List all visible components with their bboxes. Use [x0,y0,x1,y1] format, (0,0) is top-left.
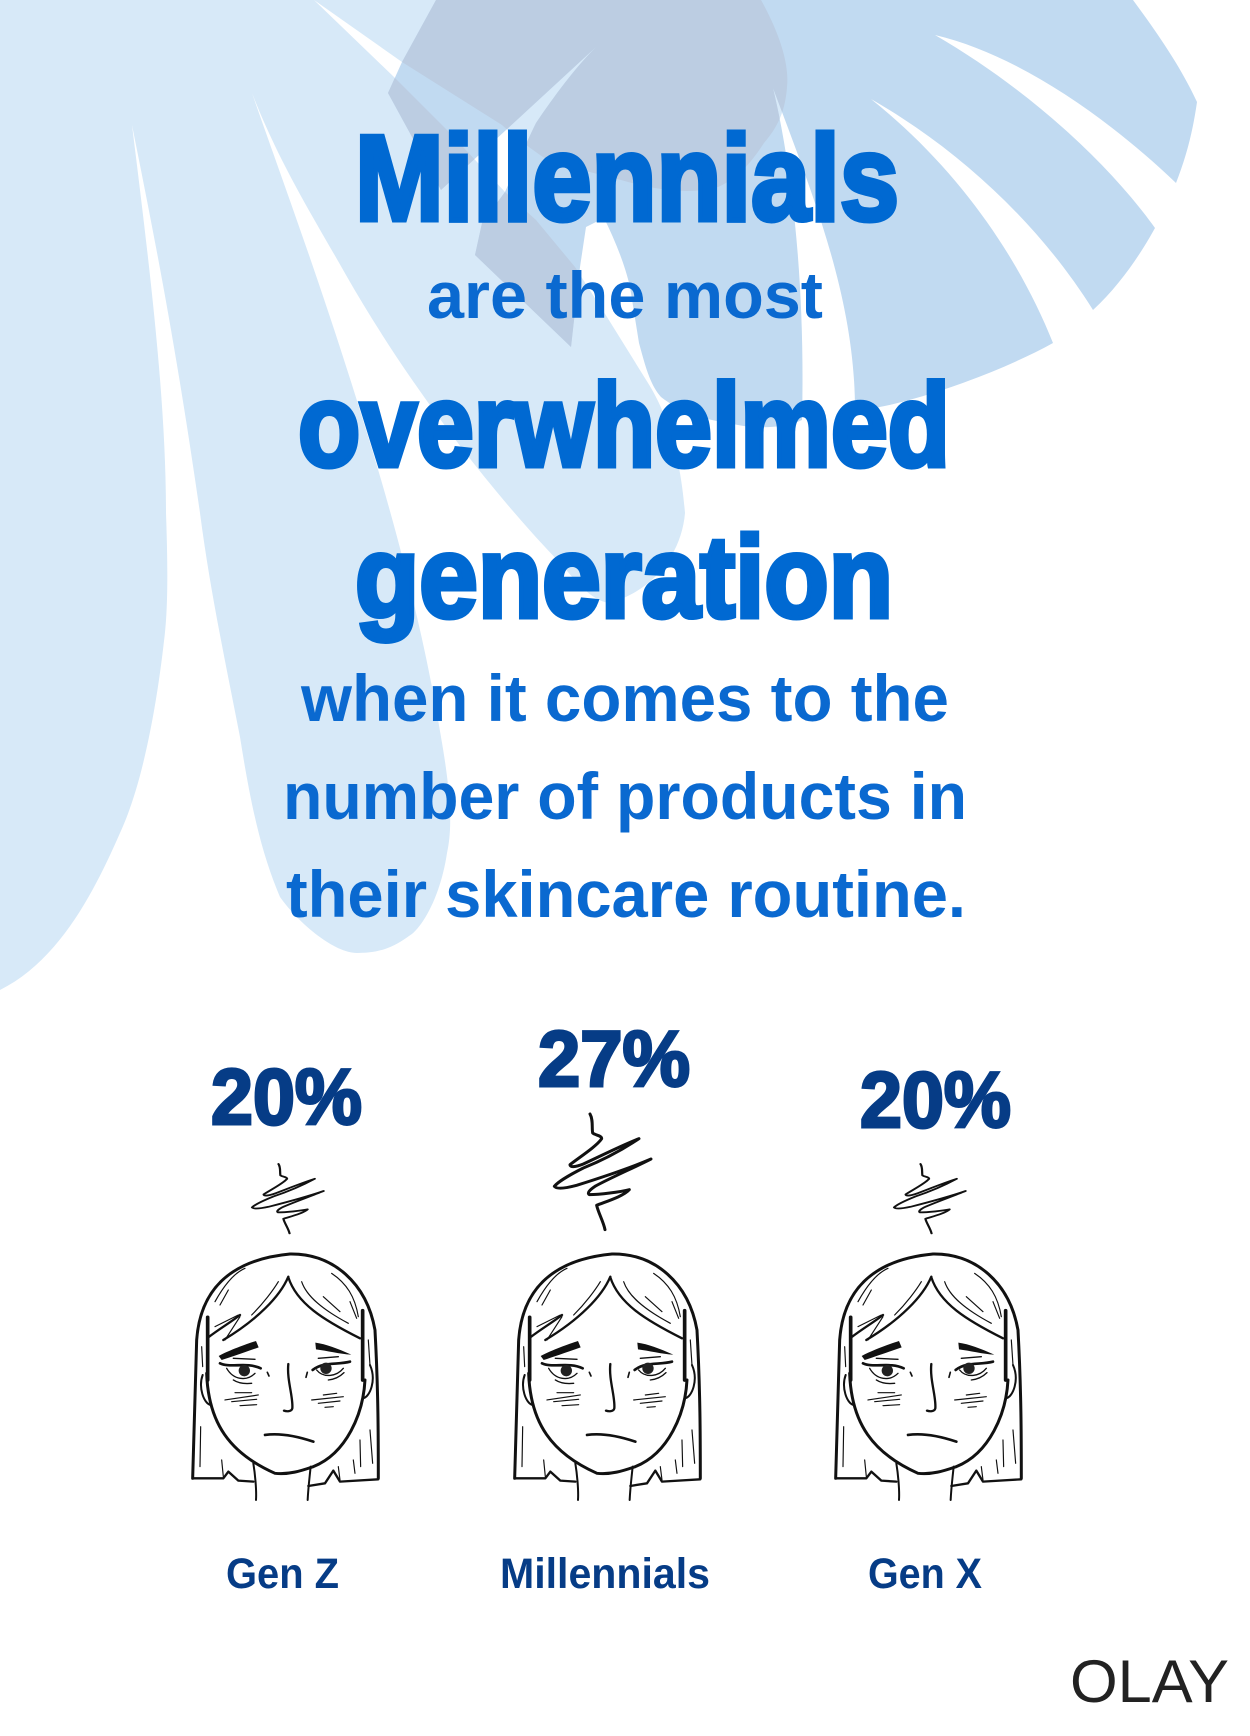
icon: stress scribble Millennials [554,1114,651,1230]
subheading line 3: their skincare routine. [286,857,966,931]
heading: Millennials: Millennials [355,110,899,246]
right mid-blue leaf [388,0,1197,427]
icon: tired face Millennials [515,1254,700,1500]
column: Gen X [836,1055,1021,1598]
left pale leaf [0,0,787,990]
stat: Gen Z 20%: 20% [211,1052,362,1141]
overlap grey-blue region [388,0,788,347]
heading: overwhelmed: overwhelmed [298,360,950,492]
label: Gen X: Gen X [868,1550,982,1598]
column: Millennials [500,1014,710,1598]
subheading: are the most: are the most [427,258,823,332]
background leaf shapes [0,0,1197,990]
subheading line 2: number of products in [283,759,967,833]
icon: stress scribble Gen Z [252,1164,324,1233]
column: Gen Z [193,1052,378,1598]
icon: tired face Gen Z [193,1254,378,1500]
heading block [283,110,967,931]
label: Gen Z: Gen Z [226,1550,339,1598]
heading: generation: generation [355,512,893,642]
icon: stress scribble Gen X [894,1164,966,1233]
subheading line 1: when it comes to the [300,661,949,735]
logo: OLAY: OLAY [1070,1648,1229,1715]
stat: Gen X 20%: 20% [860,1055,1011,1144]
stat: Millennials 27%: 27% [538,1014,690,1103]
label: Millennials: Millennials [500,1550,710,1598]
icon: tired face Gen X [836,1254,1021,1500]
